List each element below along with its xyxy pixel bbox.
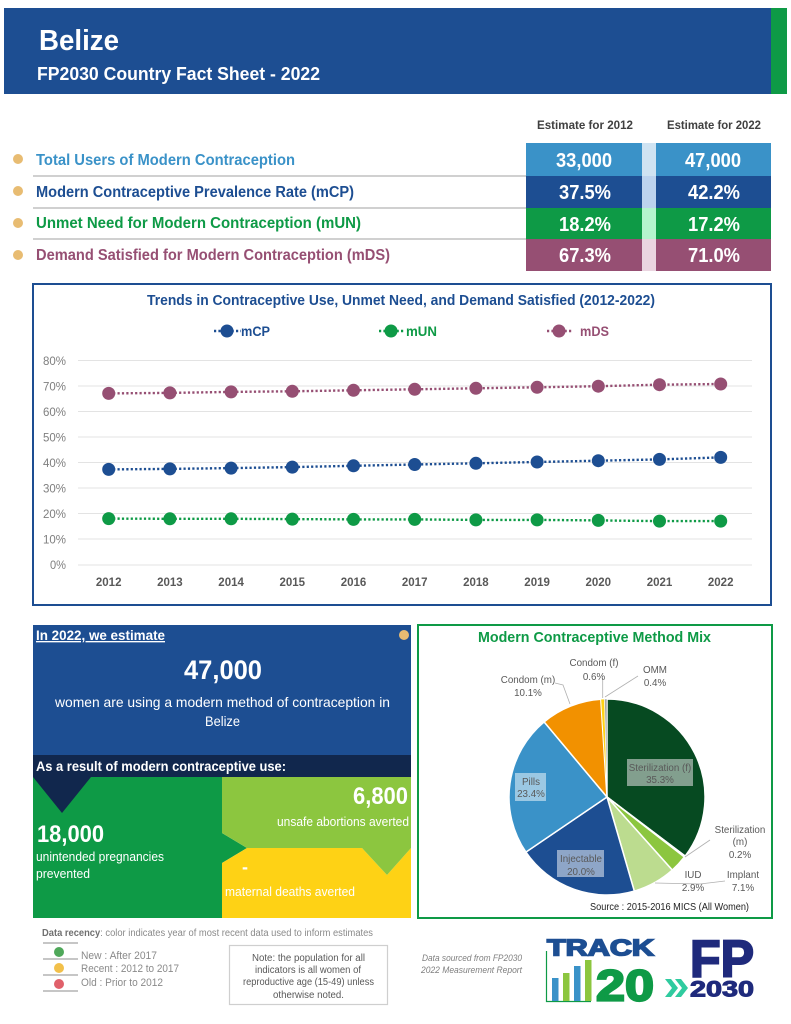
item: recent: Recent : 2012 to 2017	[81, 963, 179, 975]
logo: FP2030	[665, 930, 754, 1002]
x axis labels: 2013	[157, 577, 183, 589]
row: mDS: Demand Satisfied for Modern Contraception (mDS)	[36, 247, 390, 264]
note box: Note: the population for all	[252, 953, 365, 964]
column headings	[537, 118, 761, 132]
row: mDS: 71.0%	[688, 245, 740, 267]
label: sterilization f	[627, 759, 693, 786]
label: condom f: Condom (f)	[570, 658, 618, 669]
label: sterilization m: Sterilization	[715, 825, 765, 836]
text: users description: Belize	[205, 713, 240, 729]
block: unsafe abortions	[222, 777, 411, 875]
label: OMM	[643, 665, 667, 689]
column headings: Estimate for 2022	[667, 118, 761, 132]
data source note: Data sourced from FP2030	[422, 953, 523, 964]
x axis labels: 2012	[96, 577, 121, 589]
row: total users: 47,000	[685, 150, 741, 172]
y axis labels: 0%	[50, 558, 66, 572]
heading: in 2022: In 2022, we estimate	[36, 628, 165, 643]
label: implant	[727, 870, 759, 894]
row: total users: 33,000	[556, 150, 612, 172]
logo: FP2030: FP	[690, 930, 754, 988]
logo: Track20: TRACK	[547, 934, 654, 960]
series: mDS	[102, 378, 727, 400]
label: condom m: 10.1%	[514, 688, 542, 699]
x axis labels	[96, 577, 733, 589]
x axis labels: 2022	[708, 577, 733, 589]
block: unintended pregnancies	[33, 777, 247, 918]
label: IUD	[682, 870, 704, 894]
x axis labels: 2018	[463, 577, 489, 589]
title: country: Belize	[39, 25, 119, 57]
y axis labels: 40%	[43, 456, 66, 470]
method mix title: Modern Contraceptive Method Mix	[478, 629, 712, 646]
block: maternal deaths	[222, 848, 411, 918]
chart title: Trends in Contraceptive Use, Unmet Need, and Demand Satisfied (2012-2022)	[147, 293, 655, 309]
chart legend	[214, 324, 609, 339]
label: OMM: 0.4%	[644, 678, 666, 689]
label: sterilization m: (m)	[733, 837, 747, 848]
note box	[230, 946, 388, 1004]
item: new: New : After 2017	[81, 950, 157, 962]
row: mCP	[13, 176, 771, 208]
note box: indicators is all women of	[255, 965, 361, 976]
legend: data recency	[42, 928, 373, 991]
text: users description: women are using a modern method of contraception in	[54, 694, 390, 710]
series: mCP	[102, 451, 727, 476]
y axis labels: 60%	[43, 405, 66, 419]
label: sterilization f: 35.3%	[646, 775, 674, 786]
panel: method mix	[418, 625, 772, 918]
y axis labels: 50%	[43, 430, 66, 444]
data source note	[420, 953, 523, 976]
row: mDS: 67.3%	[559, 245, 611, 267]
label: condom m: Condom (m)	[501, 675, 555, 686]
label: injectable: 20.0%	[567, 867, 595, 878]
chart legend: mCP	[241, 324, 270, 339]
block: unintended pregnancies: 18,000	[37, 821, 104, 848]
x axis labels: 2014	[218, 577, 244, 589]
block: unintended pregnancies: unintended pregnancies	[36, 850, 164, 864]
x axis labels: 2016	[341, 577, 366, 589]
block: unsafe abortions: unsafe abortions averted	[277, 815, 409, 829]
y axis labels: 70%	[43, 380, 66, 394]
label: condom f: 0.6%	[583, 672, 605, 683]
x axis labels: 2017	[402, 577, 427, 589]
row: mCP: 37.5%	[559, 182, 611, 204]
heading: result: As a result of modern contraceptive use:	[36, 758, 286, 774]
recency dot	[399, 630, 409, 640]
y axis labels: 80%	[43, 354, 66, 368]
label: IUD: IUD	[685, 870, 701, 881]
row: mUN	[13, 208, 771, 239]
y axis labels	[43, 354, 66, 572]
x axis labels: 2020	[586, 577, 611, 589]
text: users description	[54, 694, 390, 729]
row: mUN: Unmet Need for Modern Contraception (mUN)	[36, 215, 361, 232]
panel: 2022 estimates	[33, 625, 411, 918]
legend: data recency: Data recency: color indicates year of most recent data used to inform estimates	[42, 928, 373, 939]
y axis labels: 30%	[43, 482, 66, 496]
label: pills: Pills	[522, 777, 540, 788]
x axis labels: 2021	[647, 577, 673, 589]
block: unsafe abortions: 6,800	[353, 783, 408, 810]
series: mUN	[102, 512, 727, 528]
logo: FP2030: 2030	[690, 976, 754, 1002]
note box: otherwise noted.	[273, 990, 344, 1001]
leader lines	[555, 676, 725, 884]
header banner	[4, 8, 787, 94]
row: mCP: Modern Contraceptive Prevalence Rate (mCP)	[36, 184, 354, 201]
row: mUN: 18.2%	[559, 214, 611, 236]
label: implant: 7.1%	[732, 883, 754, 894]
row: mUN: 17.2%	[688, 214, 740, 236]
item: new	[54, 947, 157, 962]
indicator table	[13, 118, 771, 271]
subtitle: FP2030 Country Fact Sheet - 2022	[37, 64, 320, 84]
arrow: band pointer	[33, 777, 91, 813]
big number: users: 47,000	[184, 655, 262, 685]
data source note: 2022 Measurement Report	[420, 965, 522, 976]
column headings: Estimate for 2012	[537, 118, 633, 132]
note box: reproductive age (15-49) unless	[243, 977, 374, 988]
label: IUD: 2.9%	[682, 883, 704, 894]
y axis labels: 10%	[43, 532, 66, 546]
chart legend: mUN	[406, 324, 437, 339]
label: condom f	[570, 658, 618, 683]
source note: Source : 2015-2016 MICS (All Women)	[590, 901, 749, 913]
label: implant: Implant	[727, 870, 759, 881]
label: sterilization f: Sterilization (f)	[629, 763, 691, 774]
label: sterilization m	[715, 825, 765, 861]
label: pills	[515, 773, 546, 801]
label: injectable	[557, 850, 604, 878]
row: mCP: 42.2%	[688, 182, 740, 204]
row: total users: Total Users of Modern Contraception	[36, 152, 295, 169]
block: maternal deaths: -	[242, 857, 248, 877]
x axis labels: 2015	[280, 577, 306, 589]
label: condom m	[501, 675, 555, 699]
pie chart	[509, 699, 705, 895]
label: injectable: Injectable	[560, 854, 603, 865]
panel: trends chart	[33, 284, 771, 605]
y axis labels: 20%	[43, 507, 66, 521]
label: pills: 23.4%	[517, 789, 545, 800]
label: OMM: OMM	[643, 665, 667, 676]
label: sterilization m: 0.2%	[729, 850, 751, 861]
block: maternal deaths: maternal deaths averted	[225, 885, 355, 899]
logo: Track20: 20	[596, 962, 654, 1010]
item: old: Old : Prior to 2012	[81, 977, 163, 989]
row: total users	[13, 143, 771, 176]
block: unintended pregnancies: prevented	[36, 867, 90, 881]
logo: Track20	[546, 934, 654, 1010]
x axis labels: 2019	[524, 577, 550, 589]
row: mDS	[13, 239, 771, 271]
chart legend: mDS	[580, 324, 609, 339]
